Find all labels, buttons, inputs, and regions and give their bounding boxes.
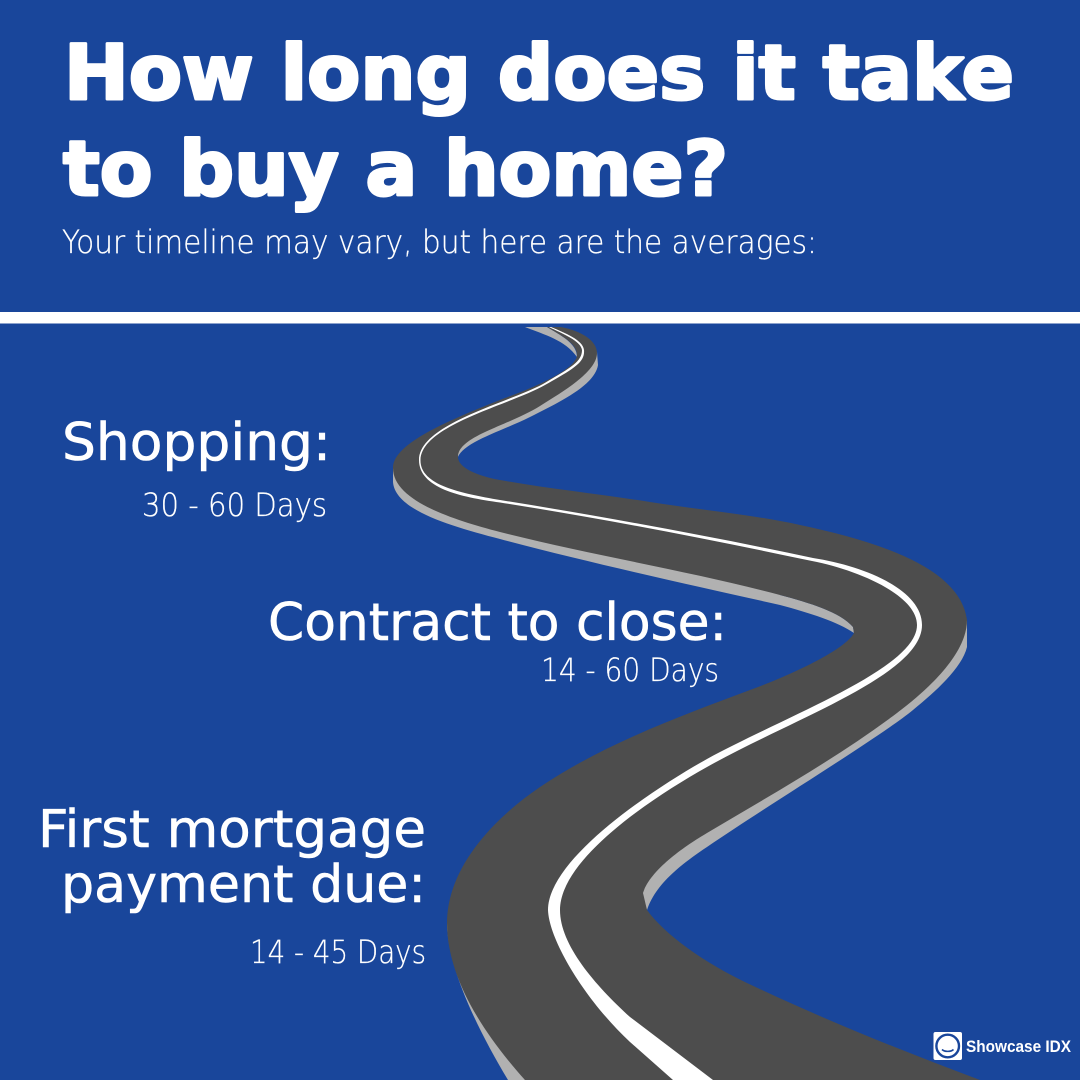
white divider bar (0, 312, 1080, 324)
logo: Showcase IDX: Showcase IDX (966, 1038, 1071, 1056)
title (63, 28, 1014, 213)
subtitle: Your timeline may vary, but here are the averages: (62, 223, 817, 261)
stage: first mortgage payment due: First mortgage (38, 800, 426, 860)
stage: shopping (62, 413, 331, 524)
illustration: winding road (393, 327, 980, 1080)
stage: shopping: Shopping: (62, 413, 331, 473)
stage: contract to close: Contract to close: (268, 593, 727, 653)
title: How long does it take (64, 28, 1014, 117)
stage: contract to close (268, 593, 727, 689)
road surface (393, 327, 980, 1080)
stage: shopping: 30 - 60 Days (142, 486, 327, 524)
stage: first mortgage payment due: 14 - 45 Days (250, 933, 426, 971)
logo: Showcase IDX (934, 1032, 1071, 1060)
road side edges (393, 327, 967, 1080)
icon: logo mark (934, 1032, 962, 1060)
stage: contract to close: 14 - 60 Days (541, 651, 719, 689)
stage: first mortgage payment due: payment due: (61, 855, 426, 915)
road centre line (419, 327, 922, 1080)
stage: first mortgage payment due (38, 800, 426, 971)
title: to buy a home? (63, 124, 728, 213)
